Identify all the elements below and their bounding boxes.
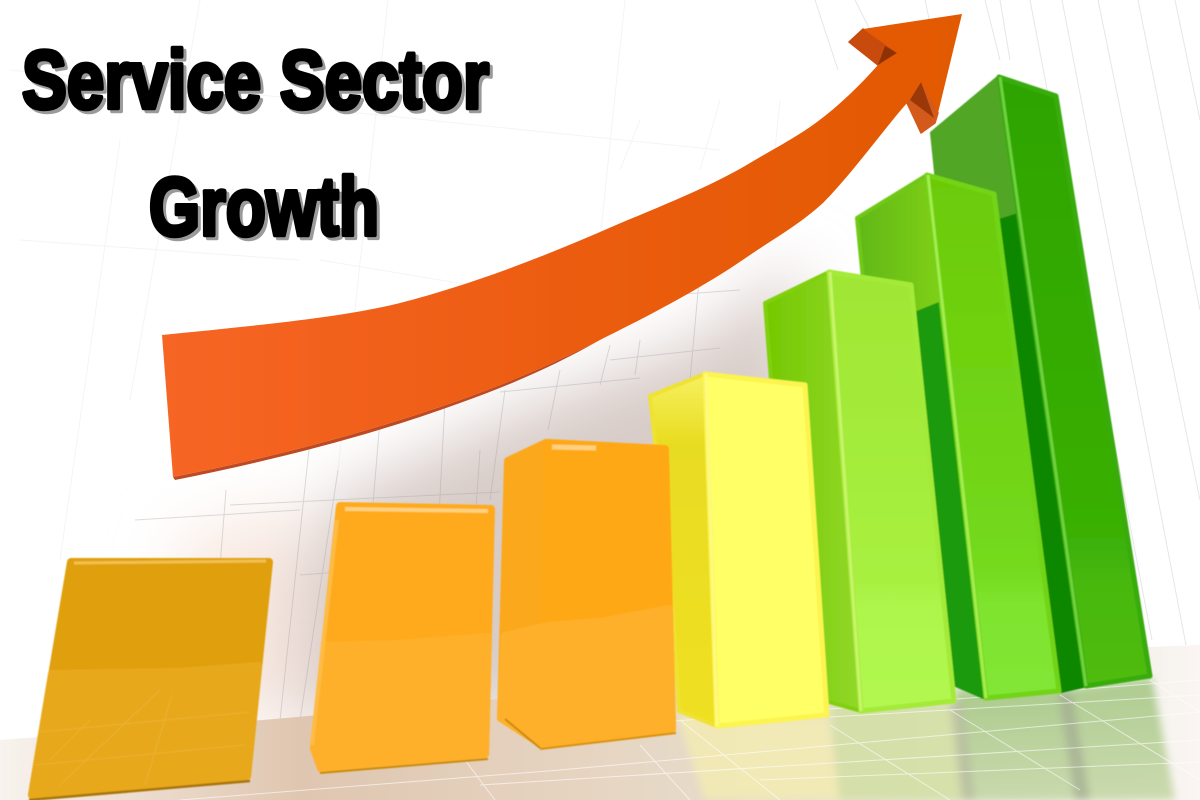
arrow body and head xyxy=(162,14,962,477)
wall shadow behind chart xyxy=(170,260,800,730)
arrow back barb upper xyxy=(849,29,897,65)
bar 7: darkest green xyxy=(932,77,1150,691)
arrow lower barb fold xyxy=(910,82,934,118)
bar 6: mid green xyxy=(857,175,1059,698)
bar 1: amber xyxy=(29,561,269,800)
title line 1: Service Sector xyxy=(22,33,489,126)
bar 2: orange xyxy=(312,506,491,773)
arrow underside shadow edge xyxy=(173,340,600,480)
floor tile lines xyxy=(180,680,1200,800)
wall grid lines xyxy=(135,270,740,720)
floor xyxy=(0,645,1200,800)
arrow barb fold xyxy=(878,46,897,65)
title xyxy=(22,33,489,253)
title line 2: Growth xyxy=(149,160,379,253)
bar 4: yellow xyxy=(650,374,827,726)
bar 5: light green xyxy=(765,272,954,711)
bar 3: orange xyxy=(501,443,676,749)
growth arrow xyxy=(162,14,962,480)
arrow back barb lower xyxy=(907,82,938,133)
bar reflections on floor xyxy=(677,678,1175,800)
